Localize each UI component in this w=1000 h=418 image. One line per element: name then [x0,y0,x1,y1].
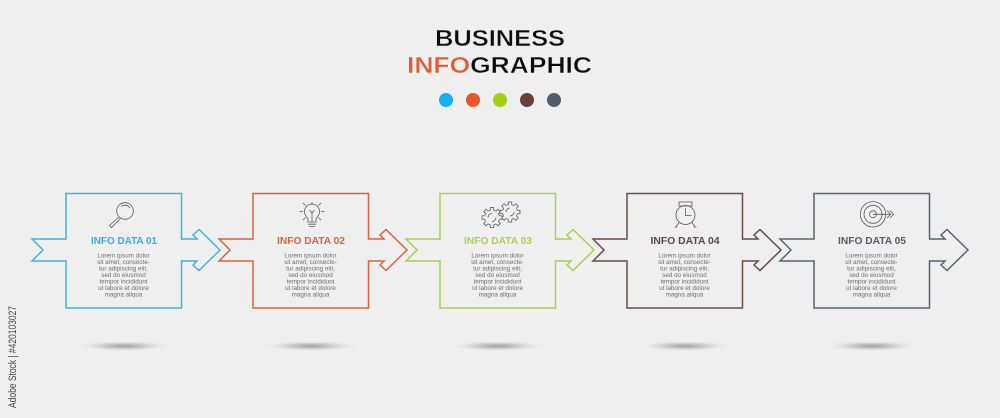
body text 02: tur adipiscing elit, [286,266,335,272]
body text 04: tempor incididunt [661,279,709,286]
shadow 05 [824,340,920,352]
body text 05: sit amet, consecte- [845,259,898,266]
title: INFO GRAPHIC [407,52,592,78]
heading 05: INFO DATA 05 [838,236,906,247]
panel: info data 01 [32,194,220,352]
body text 01: sed do eiusmod [101,272,146,279]
icon: magnifier [110,203,133,228]
arrow frame 03 [406,194,594,308]
arrow frame 05 [780,194,968,308]
body text 03: sit amet, consecte- [471,259,524,266]
icon: gears [482,202,520,228]
body text 04: Lorem ipsum dolor [658,252,711,260]
legend dots [439,93,561,107]
arrow frame 01 [32,194,220,308]
icon: light bulb [300,202,324,226]
panel: info data 05 [780,194,968,352]
heading 04: INFO DATA 04 [650,236,720,247]
body text 01: magna aliqua [105,292,143,298]
body text 02: magna aliqua [292,292,330,298]
body text 05: magna aliqua [853,292,891,298]
body text 01: sit amet, consecte- [97,259,150,266]
body text 03: sed do eiusmod [475,272,520,279]
body text 04 [658,252,711,298]
body text 04: sed do eiusmod [662,272,707,279]
body text 04: magna aliqua [666,292,704,298]
body text 05: Lorem ipsum dolor [845,252,898,260]
arrow frame 04 [593,194,781,308]
body text 05: tempor incididunt [848,279,896,286]
body text 01 [97,252,150,298]
body text 01: tempor incididunt [100,279,148,286]
shadow 02 [263,340,359,352]
shadow 03 [450,340,546,352]
heading 03: INFO DATA 03 [464,236,532,247]
stock id text: Adobe Stock | #420103027 [7,306,19,408]
body text 03: magna aliqua [479,292,517,298]
body text 05: ut labore et dolore [846,285,897,292]
shadow 04 [637,340,733,352]
arrow frame 02 [219,194,407,308]
body text 03: ut labore et dolore [472,285,523,292]
heading 01: INFO DATA 01 [91,236,157,247]
body text 03: tur adipiscing elit, [473,266,522,272]
body text 04: tur adipiscing elit, [660,266,709,272]
icon: alarm clock [674,202,696,227]
panel: info data 04 [593,194,781,352]
body text 01: ut labore et dolore [98,285,149,292]
body text 04: ut labore et dolore [659,285,710,292]
body text 02: ut labore et dolore [285,285,336,292]
icon: target [860,202,894,227]
body text 03: tempor incididunt [474,279,522,286]
body text 02: Lorem ipsum dolor [284,252,337,260]
panel: info data 02 [219,194,407,352]
body text 02: sed do eiusmod [288,272,333,279]
body text 03 [471,252,524,298]
body text 02: tempor incididunt [287,279,335,286]
body text 05: tur adipiscing elit, [847,266,896,272]
body text 02: sit amet, consecte- [284,259,337,266]
panel: info data 03 [406,194,594,352]
title [407,25,592,78]
shadow 01 [76,340,172,352]
body text 05: sed do eiusmod [849,272,894,279]
title: BUSINESS [435,25,565,51]
body text 02 [284,252,337,298]
heading 02: INFO DATA 02 [277,236,345,247]
body text 04: sit amet, consecte- [658,259,711,266]
body text 01: Lorem ipsum dolor [97,252,150,260]
body text 05 [845,252,898,298]
body text 01: tur adipiscing elit, [99,266,148,272]
body text 03: Lorem ipsum dolor [471,252,524,260]
